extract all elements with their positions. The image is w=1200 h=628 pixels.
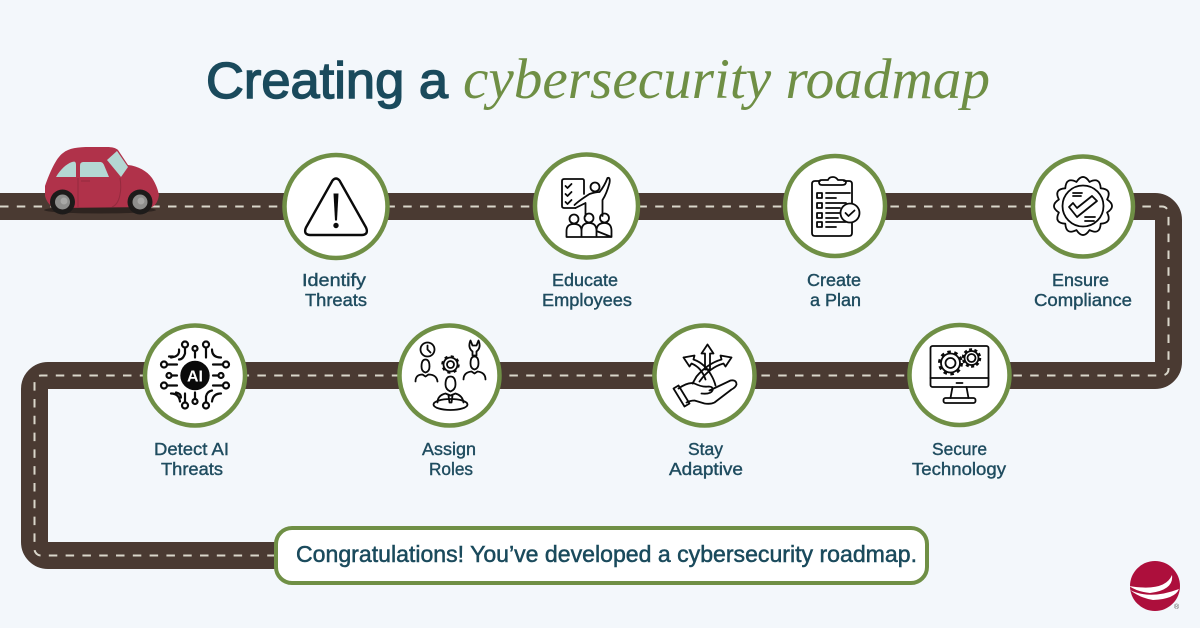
label xyxy=(302,270,367,310)
circle xyxy=(145,326,245,426)
label xyxy=(1034,270,1132,310)
circle xyxy=(284,155,388,258)
label: Stay xyxy=(688,439,723,459)
car windscreen xyxy=(107,151,128,177)
label: Create xyxy=(807,270,861,290)
car xyxy=(44,147,159,214)
title xyxy=(206,48,990,111)
icon: AI chip xyxy=(161,342,229,408)
step: Educate Employees xyxy=(535,154,638,310)
label: Roles xyxy=(429,459,473,479)
label: Secure xyxy=(932,439,987,459)
step: Secure Technology xyxy=(910,325,1010,479)
label: Threats xyxy=(305,290,367,310)
label: Adaptive xyxy=(669,459,743,479)
icon: AI chip: AI xyxy=(187,368,203,386)
circle xyxy=(910,325,1010,425)
label xyxy=(912,439,1006,479)
label: Threats xyxy=(161,459,223,479)
circle xyxy=(400,326,500,426)
icon: clipboard checklist xyxy=(812,177,860,236)
title: Creating a xyxy=(206,52,449,109)
label: Assign xyxy=(422,439,476,459)
label: Ensure xyxy=(1052,270,1109,290)
car side window xyxy=(80,162,109,177)
step: Stay Adaptive xyxy=(654,326,754,479)
title: cybersecurity roadmap xyxy=(463,48,990,111)
label: Compliance xyxy=(1034,290,1132,310)
label xyxy=(807,270,861,310)
label: Detect AI xyxy=(154,439,229,459)
car body xyxy=(45,147,159,208)
label: Technology xyxy=(912,459,1006,479)
circle xyxy=(654,326,754,426)
step: Assign Roles xyxy=(400,326,500,479)
car wheel rear xyxy=(50,190,75,214)
logo: ® xyxy=(1174,603,1180,611)
icon: presenter with audience xyxy=(562,178,612,237)
label xyxy=(542,270,632,310)
callout: congratulations: Congratulations! You’ve developed a cybersecurity roadmap. xyxy=(296,541,917,567)
label xyxy=(154,439,229,479)
logo xyxy=(1129,561,1180,611)
car shadow xyxy=(44,206,156,214)
step: Detect AI Threats xyxy=(145,326,245,479)
icon: compliance badge xyxy=(1054,177,1112,235)
car rear window xyxy=(56,162,76,177)
circle xyxy=(1033,156,1133,256)
car door xyxy=(78,178,121,207)
circle xyxy=(785,156,885,256)
road xyxy=(0,206,1169,556)
icon: hand with diverging arrows xyxy=(674,344,736,406)
icon: monitor with gears xyxy=(930,346,988,403)
step: Create a Plan xyxy=(785,156,885,310)
step: Ensure Compliance xyxy=(1033,156,1133,310)
icon: people with roles xyxy=(416,340,486,410)
step: Identify Threats xyxy=(284,155,388,310)
label xyxy=(422,439,476,479)
label xyxy=(669,439,743,479)
label: a Plan xyxy=(810,290,861,310)
circle xyxy=(535,154,638,258)
car wheel front xyxy=(128,190,152,214)
callout: congratulations xyxy=(276,528,927,583)
icon: warning triangle xyxy=(305,178,367,235)
label: Educate xyxy=(552,270,618,290)
label: Employees xyxy=(542,290,632,310)
label: Identify xyxy=(302,270,366,290)
